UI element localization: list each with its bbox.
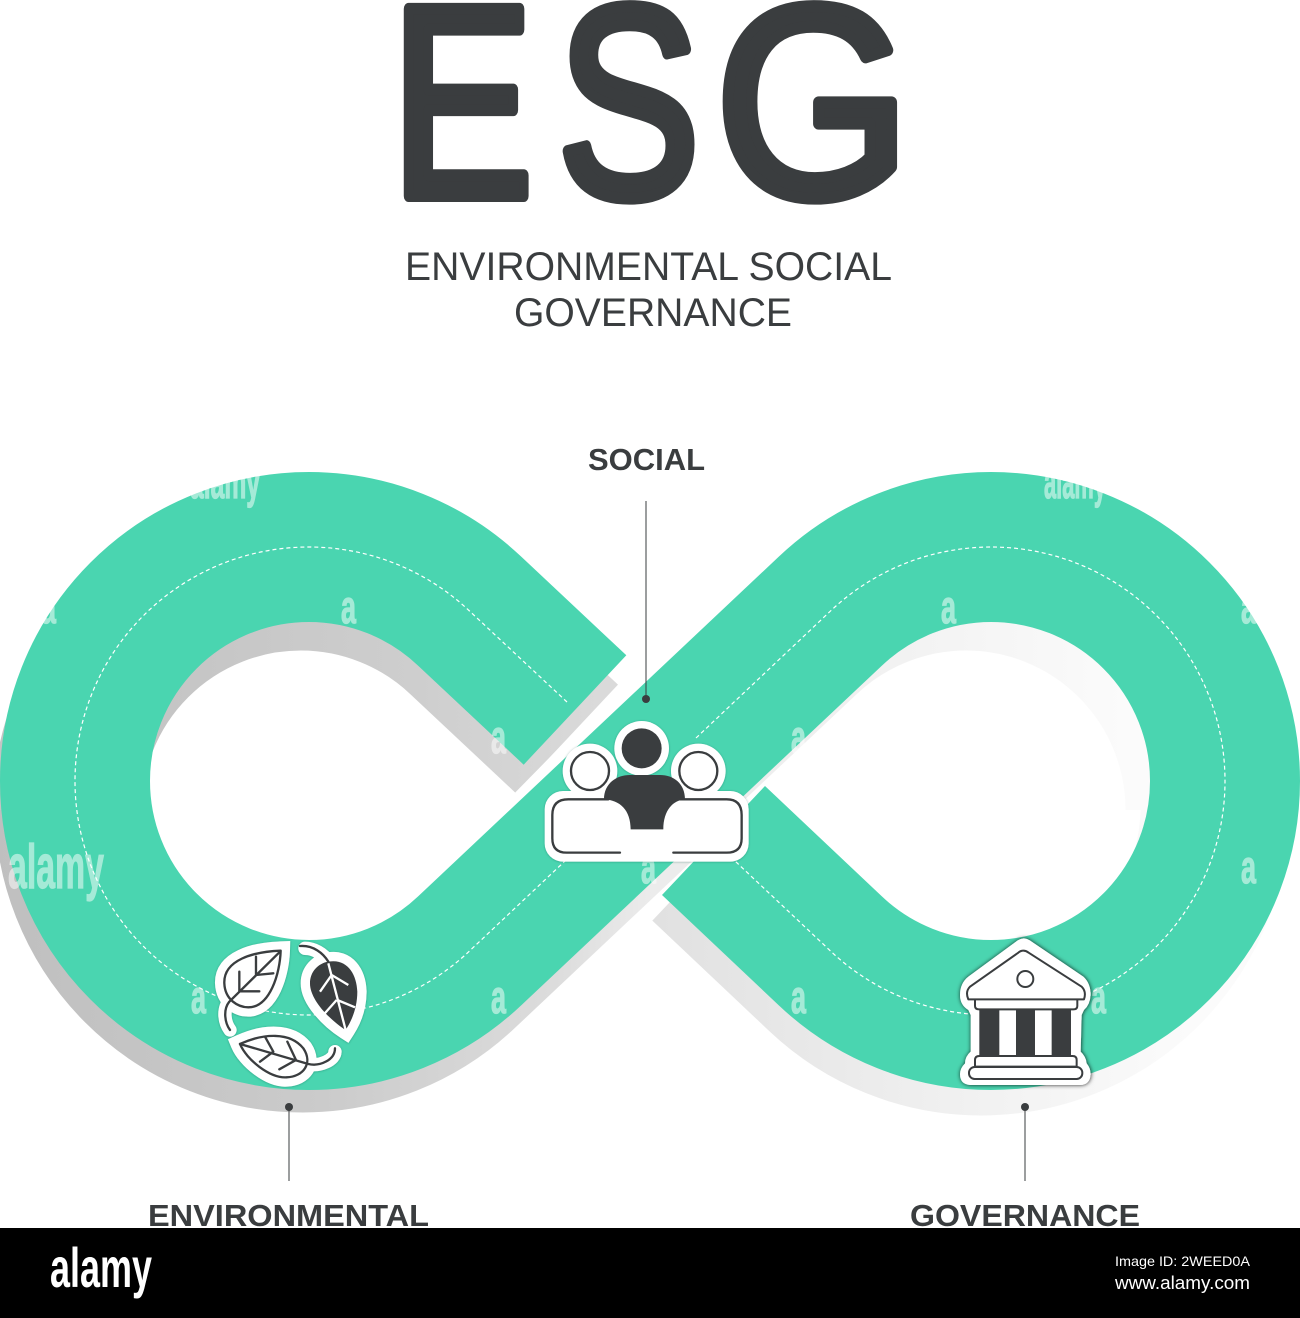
icon: governance bank xyxy=(960,938,1091,1085)
watermarks: a xyxy=(491,971,506,1023)
subtitle: GOVERNANCE xyxy=(514,291,792,335)
title: ESG xyxy=(391,0,910,254)
watermarks: a xyxy=(491,711,506,763)
icon: environmental leaves xyxy=(224,946,357,1077)
watermarks: alamy xyxy=(190,456,260,508)
leaf outline xyxy=(224,946,335,1077)
footer logo: alamy xyxy=(50,1236,152,1299)
gap beside the crossing xyxy=(500,600,720,830)
watermarks xyxy=(8,456,1256,1023)
leader: social xyxy=(642,501,650,703)
dark leaf xyxy=(310,961,357,1030)
watermarks: a xyxy=(341,581,356,633)
infinity band xyxy=(75,547,1225,1015)
subtitle xyxy=(405,245,892,335)
subtitle: ENVIRONMENTAL SOCIAL xyxy=(405,245,892,289)
watermarks: a xyxy=(641,841,656,893)
watermarks: alamy xyxy=(1044,456,1106,508)
icon: social people xyxy=(545,721,749,862)
watermarks: a xyxy=(191,971,206,1023)
dashed centre line xyxy=(75,547,1225,1015)
footer bar xyxy=(0,1228,1300,1318)
entablature xyxy=(975,1000,1077,1009)
shadow: right loop xyxy=(625,576,1215,1041)
watermarks: a xyxy=(690,581,705,633)
watermarks: a xyxy=(1241,581,1256,633)
watermarks: a xyxy=(941,581,956,633)
shadow: left loop xyxy=(67,576,644,1038)
side people xyxy=(552,752,742,853)
leader: governance xyxy=(1021,1103,1029,1181)
label: social: SOCIAL xyxy=(588,442,705,477)
watermarks: a xyxy=(1241,841,1256,893)
label: environmental: ENVIRONMENTAL xyxy=(148,1198,429,1233)
footer image id: Image ID: 2WEED0A xyxy=(1115,1253,1251,1269)
watermarks: a xyxy=(1091,971,1106,1023)
footer url: www.alamy.com xyxy=(1114,1273,1250,1293)
columns xyxy=(979,1009,1071,1056)
watermarks: alamy xyxy=(8,833,104,902)
centre person xyxy=(604,728,685,829)
roof xyxy=(967,951,1085,999)
label: governance: GOVERNANCE xyxy=(910,1198,1140,1233)
watermarks: a xyxy=(41,581,56,633)
watermarks: a xyxy=(791,971,806,1023)
watermarks: a xyxy=(791,711,806,763)
leader: environmental xyxy=(285,1103,293,1181)
roof medallion xyxy=(1017,971,1033,987)
base xyxy=(969,1056,1082,1079)
